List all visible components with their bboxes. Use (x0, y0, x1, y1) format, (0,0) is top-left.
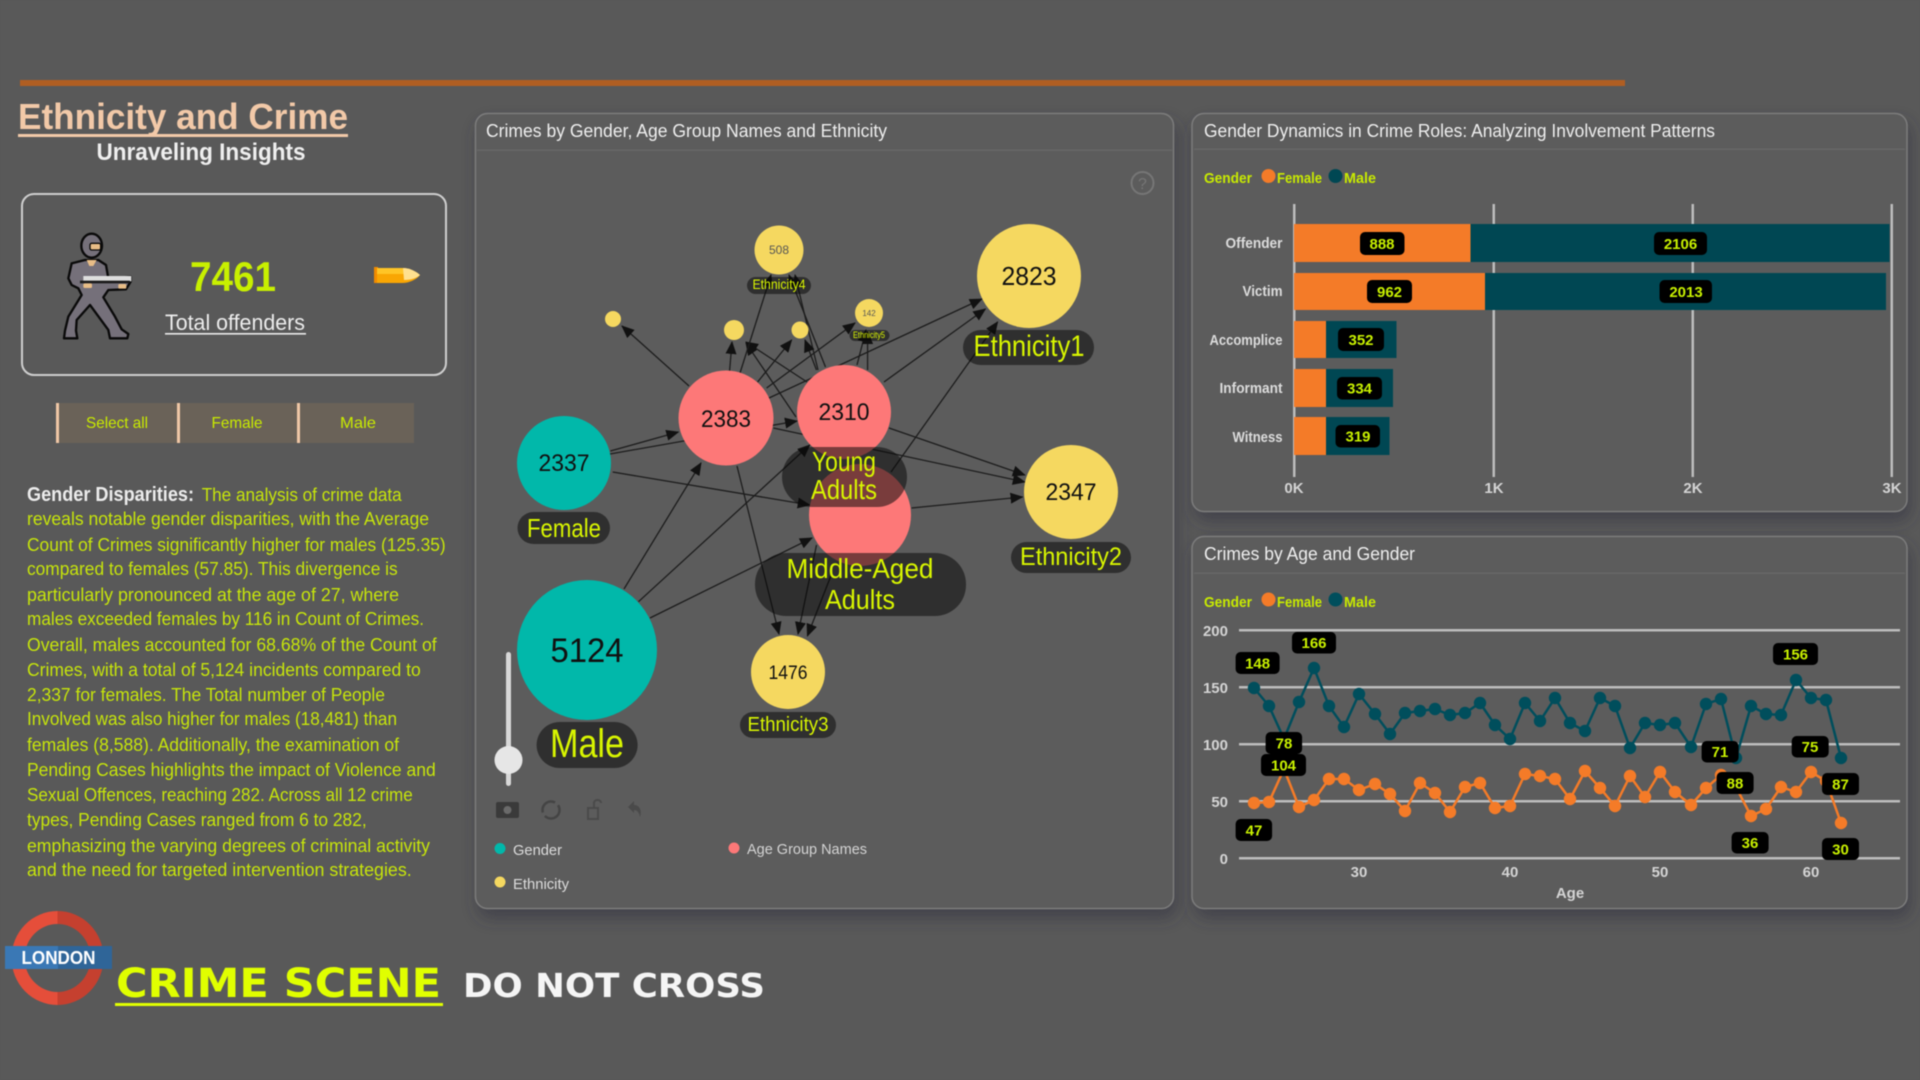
node: Ethnicity1: 2823 (1002, 261, 1056, 291)
bar row: Accomplice (1210, 321, 1396, 358)
y axis gridlines and labels (1203, 623, 1900, 868)
data labels: 47 (1246, 822, 1262, 840)
title block: Unraveling Insights (96, 139, 306, 166)
icon: camera (496, 802, 519, 818)
x axis labels: 50 (1652, 864, 1668, 881)
node: Ethnicity1: Ethnicity1 (974, 330, 1084, 363)
data labels: 88 (1727, 776, 1743, 792)
node: Male (517, 580, 657, 768)
data labels: 166 (1301, 635, 1327, 652)
node: Male: Male (550, 722, 624, 766)
icon: London roundel (5, 911, 112, 1005)
icon: London roundel: LONDON (22, 948, 96, 968)
text block: gender disparities narrative: reveals notable gender disparities, with the Average (27, 509, 429, 529)
legend (494, 841, 867, 893)
bar row: Offender: Offender (1226, 235, 1283, 252)
slicer: gender buttons (56, 403, 414, 443)
data labels: 71 (1712, 744, 1728, 761)
small ethnicity nodes (605, 311, 808, 340)
x axis labels: 60 (1803, 864, 1819, 881)
data labels: 148 (1245, 656, 1270, 672)
node: Female (517, 416, 611, 544)
data labels: 78 (1276, 736, 1292, 752)
x axis labels: 30 (1351, 864, 1367, 881)
icon: lock (588, 800, 601, 819)
node: Young Adults: Adults (811, 474, 877, 505)
node: Ethnicity5 (850, 299, 890, 341)
axis gridlines and tick labels: 3K (1882, 480, 1902, 497)
data labels (1236, 632, 1859, 860)
node: Ethnicity4: Ethnicity4 (752, 276, 806, 292)
text block: gender disparities narrative: emphasizing the varying degrees of criminal activity (27, 836, 430, 856)
data labels: 75 (1802, 739, 1818, 756)
chart legend (1204, 169, 1376, 187)
x axis labels: 40 (1502, 864, 1518, 881)
bar row: Accomplice: 352 (1348, 332, 1374, 349)
title block: Ethnicity and Crime (18, 96, 348, 137)
y axis gridlines and labels: 200 (1203, 623, 1228, 640)
bar row: Offender (1226, 224, 1890, 262)
data labels: 36 (1742, 835, 1758, 852)
text block: gender disparities narrative: compared to females (57.85). This divergence is (27, 559, 398, 579)
bar row: Victim: 2013 (1669, 284, 1703, 301)
panel: KPI total offenders (22, 194, 446, 375)
x axis labels (1351, 864, 1819, 902)
y axis gridlines and labels: 150 (1203, 680, 1228, 697)
data labels: 87 (1832, 776, 1849, 794)
icon: refresh (542, 802, 560, 818)
bar row: Offender: 888 (1369, 236, 1395, 253)
line series: Male (1254, 668, 1841, 758)
legend: Ethnicity (513, 876, 569, 893)
panel heading: Crimes by Age and Gender (1204, 544, 1415, 564)
icon: help: ? (1138, 176, 1147, 193)
icon: help (1132, 172, 1154, 194)
line series: Female (1254, 769, 1841, 823)
icon: undo (628, 801, 641, 817)
banner: crime scene: CRIME SCENE (116, 961, 441, 1007)
axis gridlines and tick labels: 2K (1683, 480, 1703, 497)
text block: gender disparities narrative: Count of Crimes significantly higher for males (125.35) (27, 535, 446, 555)
bar row: Victim (1242, 273, 1886, 310)
panel: KPI total offenders: Total offenders (165, 310, 305, 335)
data labels: 30 (1832, 842, 1849, 858)
node: age group 2383 (678, 370, 774, 466)
bar row: Victim: Victim (1242, 283, 1282, 300)
slicer: gender buttons: Female (212, 415, 263, 432)
slicer: gender buttons: Select all (86, 415, 148, 432)
text block: gender disparities narrative: females (8,588). Additionally, the examination of (27, 735, 400, 755)
node: Ethnicity3 (740, 635, 836, 738)
bar row: Witness (1232, 417, 1390, 455)
data labels: 156 (1783, 646, 1808, 664)
label: Middle-Aged Adults (755, 553, 966, 616)
bar row: Accomplice: Accomplice (1210, 332, 1282, 349)
title block (18, 96, 348, 166)
text block: gender disparities narrative: males exceeded females by 116 in Count of Crimes. (27, 609, 424, 629)
y axis gridlines and labels: 0 (1220, 851, 1228, 868)
node: Young Adults: 2310 (818, 399, 870, 426)
label: Middle-Aged Adults: Middle-Aged (786, 553, 934, 584)
node: Middle-Aged Adults circle (809, 464, 911, 566)
node: Ethnicity4 (747, 226, 811, 294)
panel: stacked bar chart of crime roles (1192, 114, 1907, 512)
text block: gender disparities narrative: The analysis of crime data (202, 485, 403, 505)
panel: line chart crimes by age and gender (1192, 536, 1907, 908)
node: Ethnicity4: 508 (769, 243, 789, 257)
text block: gender disparities narrative: Crimes, with a total of 5,124 incidents compared to (27, 660, 421, 680)
axis gridlines and tick labels: 1K (1484, 480, 1504, 497)
chart legend: Gender (1204, 170, 1252, 187)
icon: masked offender with gun (64, 234, 131, 338)
text block: gender disparities narrative: Overall, males accounted for 68.68% of the Count of (27, 635, 438, 655)
node: Ethnicity1 (963, 224, 1094, 365)
node: Ethnicity5: Ethnicity5 (853, 330, 885, 340)
label: Middle-Aged Adults: Adults (825, 584, 895, 615)
zoom slider (494, 652, 522, 786)
text block: gender disparities narrative: Sexual Offences, reaching 282. Across all 12 crime (27, 785, 413, 805)
panel heading: Gender Dynamics in Crime Roles: Analyzing Involvement Patterns (1204, 121, 1715, 141)
network edges (610, 275, 1025, 636)
node: Male: 5124 (550, 632, 624, 670)
axis gridlines and tick labels (1284, 204, 1902, 497)
node: Young Adults (782, 365, 907, 507)
node: Ethnicity5: 142 (862, 309, 876, 318)
node: Young Adults: Young (812, 446, 876, 477)
axis gridlines and tick labels: 0K (1284, 480, 1304, 497)
bar row: Witness: Witness (1232, 429, 1282, 446)
legend: Age Group Names (747, 841, 867, 858)
node: Ethnicity2 (1011, 445, 1131, 573)
chart legend: Female (1277, 594, 1322, 611)
node: Female: 2337 (538, 450, 590, 477)
text block: gender disparities narrative: and the need for targeted intervention strategies. (27, 860, 412, 880)
node: age group 2383: 2383 (701, 406, 751, 433)
chart legend: Female (1277, 170, 1322, 187)
text block: gender disparities narrative: Gender Disparities: (27, 484, 194, 506)
text block: gender disparities narrative: Pending Cases highlights the impact of Violence and (27, 760, 436, 780)
node: Ethnicity3: 1476 (768, 663, 808, 684)
text block: gender disparities narrative: types, Pending Cases ranged from 6 to 282, (27, 810, 367, 830)
node: Female: Female (527, 513, 601, 543)
text block: gender disparities narrative (27, 484, 446, 880)
bar row: Victim: 962 (1377, 284, 1402, 301)
chart legend: Gender (1204, 594, 1252, 611)
chart legend (1204, 592, 1376, 611)
icon: bullet (374, 267, 420, 283)
legend: Gender (513, 842, 562, 859)
bar row: Informant (1220, 369, 1393, 407)
bar row: Offender: 2106 (1664, 236, 1697, 253)
y axis gridlines and labels: 100 (1203, 737, 1228, 754)
toolbar icons (496, 800, 641, 819)
text block: gender disparities narrative: particularly pronounced at the age of 27, where (27, 585, 399, 605)
node: Ethnicity2: Ethnicity2 (1020, 543, 1122, 571)
bar row: Witness: 319 (1345, 428, 1371, 446)
text block: gender disparities narrative: 2,337 for females. The Total number of People (27, 685, 385, 705)
top accent rule (20, 80, 1625, 86)
panel heading: Crimes by Gender, Age Group Names and Ethnicity (486, 121, 887, 141)
panel: network graph (476, 114, 1174, 908)
slicer: gender buttons: Male (340, 415, 376, 432)
panel: KPI total offenders: 7461 (190, 253, 276, 300)
bar row: Informant: 334 (1347, 380, 1373, 398)
banner: do not cross: DO NOT CROSS (463, 966, 765, 1005)
x axis labels: Age (1556, 885, 1584, 902)
text block: gender disparities narrative: Involved was also higher for males (18,481) than (27, 709, 397, 729)
chart legend: Male (1344, 594, 1376, 611)
bar row: Informant: Informant (1220, 380, 1282, 397)
chart legend: Male (1344, 170, 1376, 187)
y axis gridlines and labels: 50 (1211, 794, 1228, 811)
node: Ethnicity2: 2347 (1046, 479, 1096, 506)
data labels: 104 (1271, 758, 1297, 774)
node: Ethnicity3: Ethnicity3 (748, 714, 828, 736)
